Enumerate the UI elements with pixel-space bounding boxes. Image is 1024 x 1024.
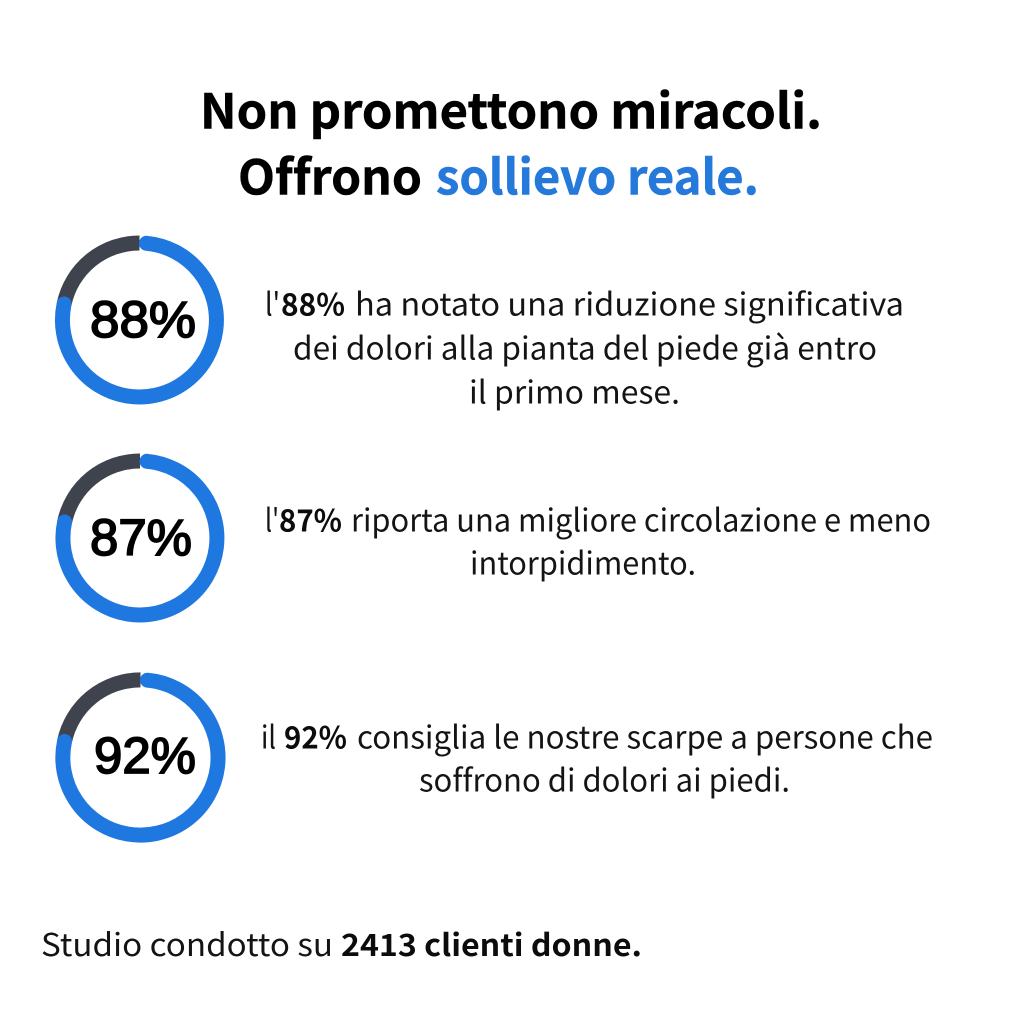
description: 88% [265,280,904,414]
description: 92%: 92% [284,714,347,758]
value: 92%: 92% [94,727,196,784]
footnote [41,920,642,966]
description: 87%: l' [265,496,279,542]
donut chart: 87% [63,461,217,615]
description: 87% [265,496,931,584]
footnote: Studio condotto su [41,920,333,966]
panel: 92% statistic [63,680,933,835]
donut chart: 88% [62,243,216,397]
description: 87%: 87% [279,496,342,540]
description: 92%: consiglia le nostre scarpe a persone che [357,712,933,758]
description: 87%: intorpidimento. [470,538,696,584]
description: 92% [261,712,933,802]
description: 88%: dei dolori alla pianta del piede già entro [293,324,877,370]
title: Non promettono miracoli. [200,72,822,142]
footnote: 2413 clienti donne. [341,921,642,965]
description: 92%: soffrono di dolori ai piedi. [419,756,790,802]
description: 88%: ha notato una riduzione significativa [355,280,904,326]
description: 88%: l' [265,280,280,326]
title: sollievo reale. [436,138,759,208]
description: 88%: 88% [281,280,345,324]
donut chart: 92% [63,680,218,835]
title: Offrono [238,138,422,208]
description: 88%: il primo mese. [469,368,680,414]
value: 87%: 87% [90,509,192,566]
description: 92%: il [261,712,276,758]
description: 87%: riporta una migliore circolazione e meno [351,496,931,542]
panel: 88% statistic [62,243,904,414]
panel: 87% statistic [63,461,931,615]
value: 88%: 88% [90,291,196,348]
title [200,72,822,208]
